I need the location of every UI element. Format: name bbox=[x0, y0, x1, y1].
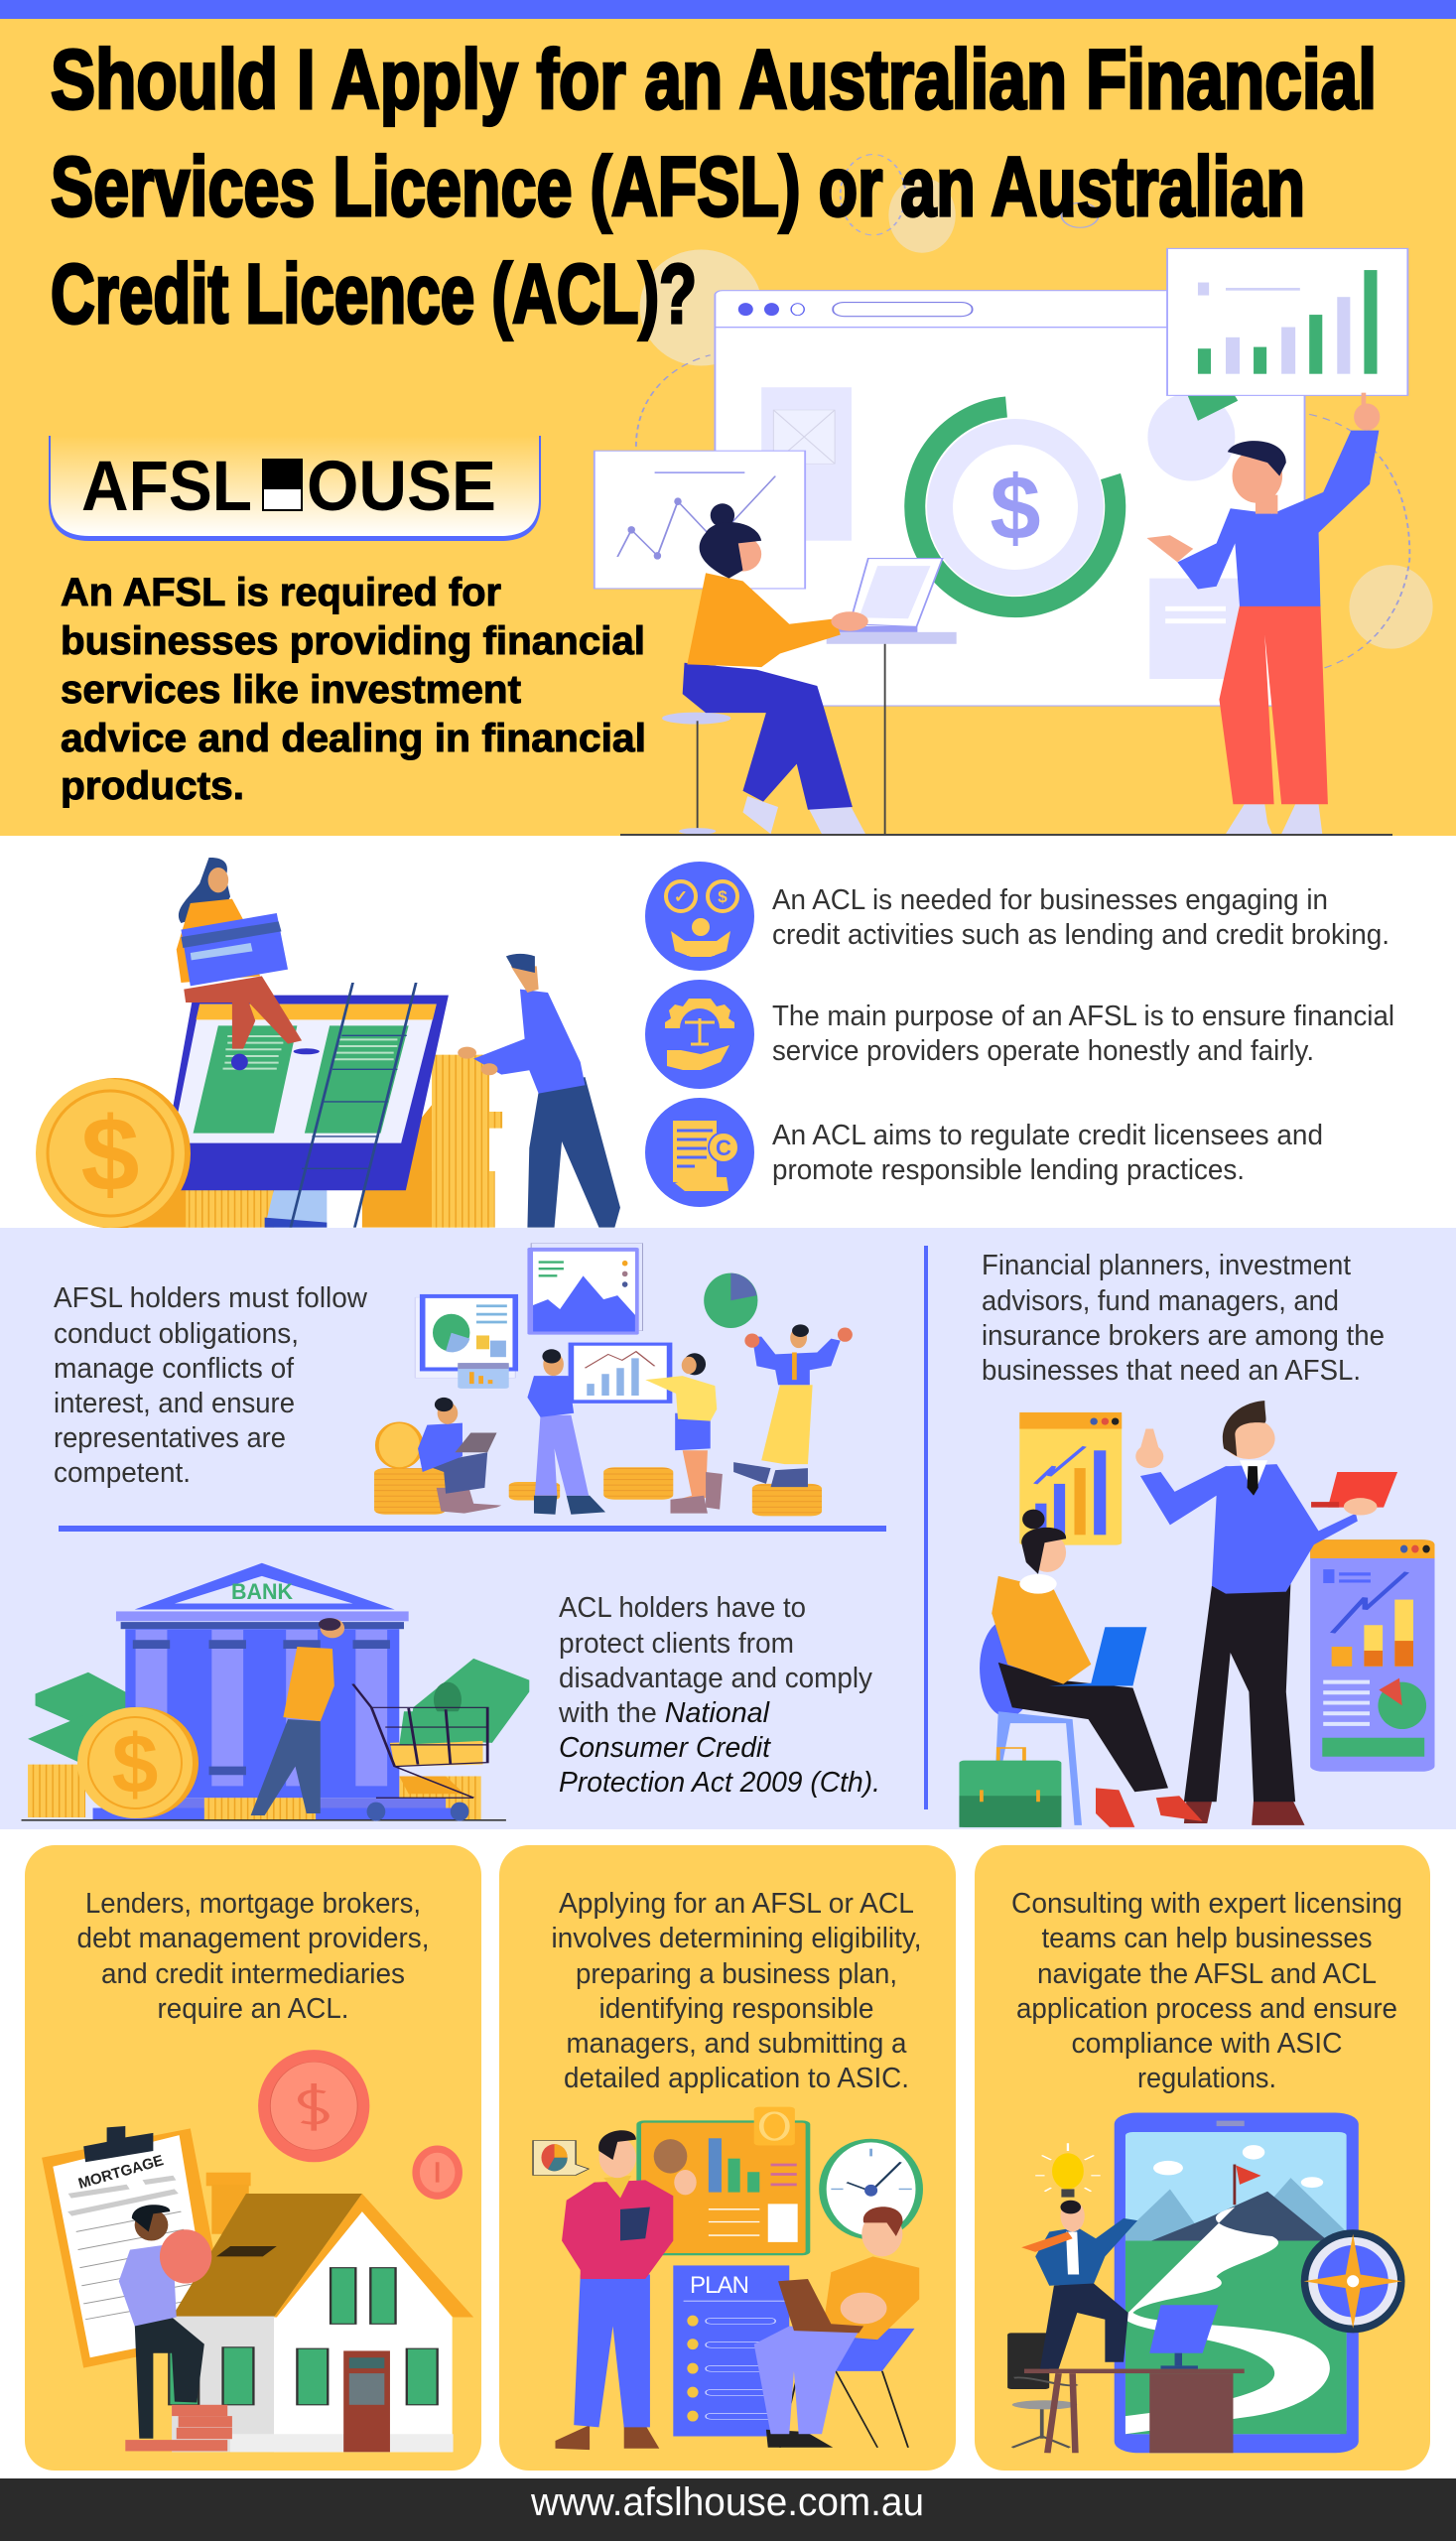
icon: coins and person: ✓ bbox=[674, 887, 688, 906]
standing man bbox=[1146, 393, 1380, 834]
subheading text: products. bbox=[61, 764, 244, 808]
speech bubble bbox=[533, 2141, 589, 2175]
coin stacks bbox=[374, 1422, 822, 1516]
plan label: PLAN bbox=[690, 2272, 749, 2299]
footer bbox=[0, 2478, 1456, 2541]
floating pie chart bbox=[704, 1273, 757, 1328]
woman in yellow bbox=[645, 1353, 723, 1514]
text: ACL holders: protect clients from bbox=[559, 1628, 794, 1660]
text: consulting: navigate the AFSL and ACL bbox=[1037, 1958, 1377, 1990]
illustration: business plan bbox=[533, 2107, 919, 2450]
panel: card application bbox=[499, 1845, 956, 2471]
text: lenders bbox=[77, 1888, 429, 2025]
text: who needs an AFSL: Financial planners, investment bbox=[982, 1250, 1351, 1281]
ladder bbox=[291, 983, 416, 1228]
subheading text bbox=[61, 571, 646, 808]
text: consulting: Consulting with expert licensing bbox=[1011, 1888, 1402, 1920]
analytics panel bbox=[1310, 1539, 1435, 1772]
mortgage label: MORTGAGE bbox=[76, 2152, 166, 2193]
text: ACL holders: Protection Act 2009 (Cth). bbox=[559, 1767, 880, 1799]
money stacks bbox=[28, 1659, 529, 1819]
text: AFSL holders bbox=[54, 1282, 368, 1489]
text: ACL holders: disadvantage and comply bbox=[559, 1663, 872, 1694]
title bbox=[51, 33, 1377, 340]
illustration: people bbox=[662, 393, 1380, 835]
clipboard bbox=[42, 2126, 230, 2368]
text: AFSL holders: interest, and ensure bbox=[54, 1388, 295, 1419]
logo: AFSL House: OUSE bbox=[307, 448, 496, 526]
text: AFSL holders: conduct obligations, bbox=[54, 1318, 299, 1350]
standing man in blue bbox=[527, 1349, 605, 1515]
coin stacks bbox=[125, 1055, 502, 1228]
line chart card bbox=[595, 451, 805, 589]
text: ACL aims: promote responsible lending practices. bbox=[772, 1154, 1245, 1186]
text: ACL holders: Consumer Credit bbox=[559, 1732, 772, 1764]
bank coin bbox=[77, 1707, 199, 1818]
text: application: identifying responsible bbox=[599, 1993, 873, 2025]
panel: ACL and AFSL purpose bbox=[36, 858, 1394, 1229]
text: application: involves determining eligibility, bbox=[552, 1923, 921, 1954]
dashboard: mountain chart bbox=[527, 1244, 642, 1335]
shopper with cart bbox=[251, 1618, 487, 1821]
bank label: BANK bbox=[231, 1579, 293, 1604]
man with red laptop bbox=[1135, 1401, 1397, 1825]
text: ACL aims bbox=[772, 1120, 1323, 1186]
text: AFSL holders: representatives are bbox=[54, 1422, 286, 1454]
panel: card lenders bbox=[25, 1845, 481, 2471]
text: ACL holders: ACL holders have to bbox=[559, 1592, 806, 1624]
text: who needs an AFSL: businesses that need an AFSL. bbox=[982, 1355, 1361, 1387]
seated woman bbox=[662, 503, 868, 835]
icon: coins and person: $ bbox=[718, 887, 728, 906]
illustration: bank with shopper bbox=[22, 1563, 529, 1821]
text: ACL holders: with the National bbox=[558, 1697, 771, 1729]
text: application: preparing a business plan, bbox=[576, 1958, 897, 1990]
icon: document with copyright mark: C bbox=[716, 1136, 731, 1160]
text: lenders: require an ACL. bbox=[157, 1993, 349, 2025]
text: ACL aims: An ACL aims to regulate credit licensees and bbox=[772, 1120, 1323, 1151]
text: AFSL holders: competent. bbox=[54, 1457, 191, 1489]
bar chart card bbox=[1167, 248, 1407, 395]
text: application: managers, and submitting a bbox=[566, 2028, 907, 2060]
browser window bbox=[715, 291, 1305, 706]
big coin: $ bbox=[81, 1096, 139, 1213]
man on desk bbox=[1021, 2201, 1137, 2369]
illustration: monitor with people and coins bbox=[125, 858, 620, 1228]
text: application: Applying for an AFSL or ACL bbox=[559, 1888, 914, 1920]
office chair bbox=[1007, 2333, 1077, 2448]
panel: card consulting bbox=[975, 1845, 1430, 2471]
panel: holders and businesses bbox=[0, 1228, 1456, 1829]
text: ACL needed bbox=[772, 884, 1390, 951]
light bulb bbox=[1035, 2143, 1101, 2198]
title: Credit Licence (ACL)? bbox=[51, 247, 697, 340]
text: application bbox=[552, 1888, 921, 2094]
desk bbox=[827, 632, 957, 835]
phone bbox=[1115, 2112, 1359, 2453]
man with laptop bbox=[754, 2207, 919, 2448]
text: ACL holders bbox=[558, 1592, 880, 1799]
text: application: detailed application to ASIC. bbox=[564, 2063, 909, 2094]
seated person with laptop bbox=[418, 1398, 501, 1514]
text: ACL needed: credit activities such as lending and credit broking. bbox=[772, 919, 1390, 951]
text: lenders: debt management providers, bbox=[77, 1923, 429, 1954]
pie wedge bbox=[1181, 378, 1238, 421]
subheading text: businesses providing financial bbox=[61, 619, 645, 663]
text: AFSL holders: manage conflicts of bbox=[54, 1353, 295, 1385]
panel: hero bbox=[0, 0, 1456, 836]
subheading text: services like investment bbox=[61, 668, 521, 712]
text: AFSL holders: AFSL holders must follow bbox=[54, 1282, 368, 1314]
footer: www.afslhouse.com.au bbox=[530, 2480, 924, 2524]
icon: document with copyright mark bbox=[645, 1098, 754, 1207]
text: ACL needed: An ACL is needed for businesses engaging in bbox=[772, 884, 1328, 916]
coins bbox=[258, 2050, 463, 2200]
laptop bbox=[836, 559, 943, 632]
text: who needs an AFSL: advisors, fund managers, and bbox=[982, 1285, 1339, 1317]
illustration: team with dashboards bbox=[374, 1244, 853, 1516]
clock bbox=[823, 2141, 919, 2237]
icon: coins and person bbox=[645, 862, 754, 971]
text: consulting: compliance with ASIC bbox=[1072, 2028, 1342, 2060]
man pushing coins bbox=[458, 954, 620, 1228]
text: consulting: application process and ensure bbox=[1016, 1993, 1397, 2025]
text: consulting: regulations. bbox=[1137, 2063, 1276, 2094]
illustration: mortgage and house bbox=[42, 2050, 473, 2452]
text: lenders: Lenders, mortgage brokers, bbox=[85, 1888, 421, 1920]
bank coin: $ bbox=[112, 1717, 158, 1810]
growth chart panel bbox=[1019, 1412, 1122, 1545]
bank building bbox=[22, 1563, 506, 1821]
man in pink sweater bbox=[555, 2130, 697, 2450]
text: AFSL purpose: The main purpose of an AFSL is to ensure financial bbox=[772, 1001, 1394, 1032]
monitor bbox=[158, 996, 449, 1228]
text: consulting: teams can help businesses bbox=[1042, 1923, 1372, 1954]
text: consulting bbox=[1011, 1888, 1402, 2094]
text: AFSL purpose: service providers operate honestly and fairly. bbox=[772, 1035, 1314, 1067]
text: who needs an AFSL: insurance brokers are among the bbox=[982, 1320, 1385, 1352]
desk bbox=[1024, 2305, 1245, 2453]
text: AFSL purpose bbox=[772, 1001, 1394, 1067]
dashboard: bar chart bbox=[569, 1343, 672, 1404]
text: who needs an AFSL bbox=[982, 1250, 1385, 1387]
orange board bbox=[639, 2107, 808, 2254]
logo: AFSL House bbox=[49, 436, 541, 541]
illustration: phone roadmap bbox=[1007, 2112, 1405, 2453]
dashboard: pie chart bbox=[415, 1294, 518, 1389]
illustration: office presentation bbox=[595, 155, 1433, 706]
subheading text: An AFSL is required for bbox=[61, 571, 501, 614]
house bbox=[169, 2173, 473, 2452]
subheading text: advice and dealing in financial bbox=[61, 717, 646, 760]
compass bbox=[1301, 2229, 1405, 2333]
plan board bbox=[673, 2265, 789, 2436]
dollar ring: $ bbox=[990, 458, 1041, 559]
coin stack bbox=[125, 2405, 232, 2451]
text: lenders: and credit intermediaries bbox=[101, 1958, 405, 1990]
briefcase bbox=[959, 1748, 1061, 1827]
man with coin bbox=[119, 2205, 211, 2439]
illustration: professionals with laptops bbox=[959, 1401, 1435, 1827]
man cheering bbox=[733, 1324, 853, 1487]
logo: AFSL House: AFSL bbox=[81, 448, 252, 526]
big coin bbox=[36, 1078, 191, 1229]
dollar ring bbox=[915, 407, 1116, 607]
woman with card bbox=[177, 858, 320, 1070]
icon: gear, scales and hand bbox=[645, 980, 754, 1089]
woman with blue laptop bbox=[980, 1510, 1203, 1827]
